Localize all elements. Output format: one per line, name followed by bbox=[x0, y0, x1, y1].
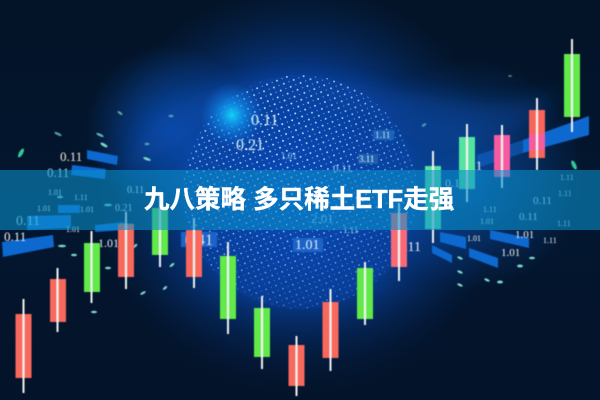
lens flare bbox=[200, 83, 264, 147]
numeric labels: 1.01 bbox=[281, 151, 297, 161]
numeric labels: 0.11 bbox=[519, 211, 538, 223]
numeric labels: 1.01 bbox=[80, 205, 94, 214]
candle 10 bbox=[322, 289, 338, 371]
numeric labels: 1.01 bbox=[37, 204, 51, 213]
numeric labels: 1.11 bbox=[74, 193, 88, 202]
candle 8 bbox=[254, 296, 270, 369]
numeric labels: 1.11 bbox=[557, 219, 571, 228]
numeric labels: 1.01 bbox=[467, 234, 481, 243]
candle 12 bbox=[391, 203, 407, 281]
candle 15 bbox=[494, 125, 510, 188]
numeric labels: 2.01 bbox=[311, 211, 334, 226]
numeric labels: 0.11 bbox=[4, 229, 26, 244]
numeric labels: 3.11 bbox=[359, 154, 374, 164]
numeric labels bbox=[4, 112, 574, 259]
numeric labels: 0.11 bbox=[445, 176, 466, 190]
teal data flecks bbox=[17, 75, 578, 313]
numeric labels: 1.01 bbox=[295, 238, 320, 253]
candle 13 bbox=[425, 151, 441, 243]
numeric labels: 0.11 bbox=[333, 163, 352, 175]
numeric labels: 1.01 bbox=[48, 188, 62, 197]
title: 九八策略 多只稀土ETF走强 bbox=[144, 186, 454, 214]
candle 16 bbox=[529, 98, 545, 170]
candle 2 bbox=[50, 268, 66, 332]
blue slanted bars bbox=[2, 116, 589, 268]
numeric labels: 1.01 bbox=[119, 222, 133, 231]
numeric labels: 1.01 bbox=[66, 225, 80, 234]
candle 9 bbox=[288, 336, 304, 396]
numeric labels: 0.21 bbox=[236, 137, 264, 154]
numeric labels: 0.11 bbox=[47, 165, 69, 180]
dotted globe bbox=[183, 75, 417, 309]
candle 5 bbox=[152, 192, 168, 267]
candle 4 bbox=[118, 212, 134, 289]
numeric labels: 1.01 bbox=[501, 247, 520, 259]
candle 7 bbox=[220, 242, 236, 334]
candle 17 bbox=[564, 39, 580, 132]
candle 14 bbox=[459, 124, 475, 202]
numeric labels: 1.11 bbox=[375, 130, 390, 140]
numeric labels: 1.11 bbox=[543, 236, 557, 245]
numeric labels: 1.01 bbox=[480, 217, 494, 226]
numeric labels: 0.11 bbox=[533, 195, 552, 207]
candle 3 bbox=[84, 231, 100, 303]
numeric labels: 0.11 bbox=[251, 112, 278, 129]
candle 6 bbox=[186, 218, 202, 288]
numeric labels: 1.11 bbox=[343, 225, 358, 235]
numeric labels: 0.11 bbox=[16, 214, 40, 229]
numeric labels: 0.41 bbox=[185, 232, 213, 249]
numeric labels: 1.11 bbox=[483, 205, 497, 214]
numeric labels: 1.11 bbox=[558, 189, 572, 198]
candle 11 bbox=[357, 262, 373, 325]
numeric labels: 0.11 bbox=[460, 158, 482, 173]
numeric labels: 1.01 bbox=[98, 236, 119, 250]
title banner bbox=[0, 170, 600, 230]
numeric labels: 1.11 bbox=[560, 173, 574, 182]
candle 1 bbox=[16, 299, 32, 393]
numeric labels: 0.11 bbox=[127, 185, 144, 196]
numeric labels: 0.11 bbox=[60, 149, 82, 164]
numeric labels: 1.01 bbox=[515, 229, 534, 241]
numeric labels: 0.21 bbox=[115, 203, 132, 214]
numeric labels: 0.11 bbox=[397, 240, 421, 255]
